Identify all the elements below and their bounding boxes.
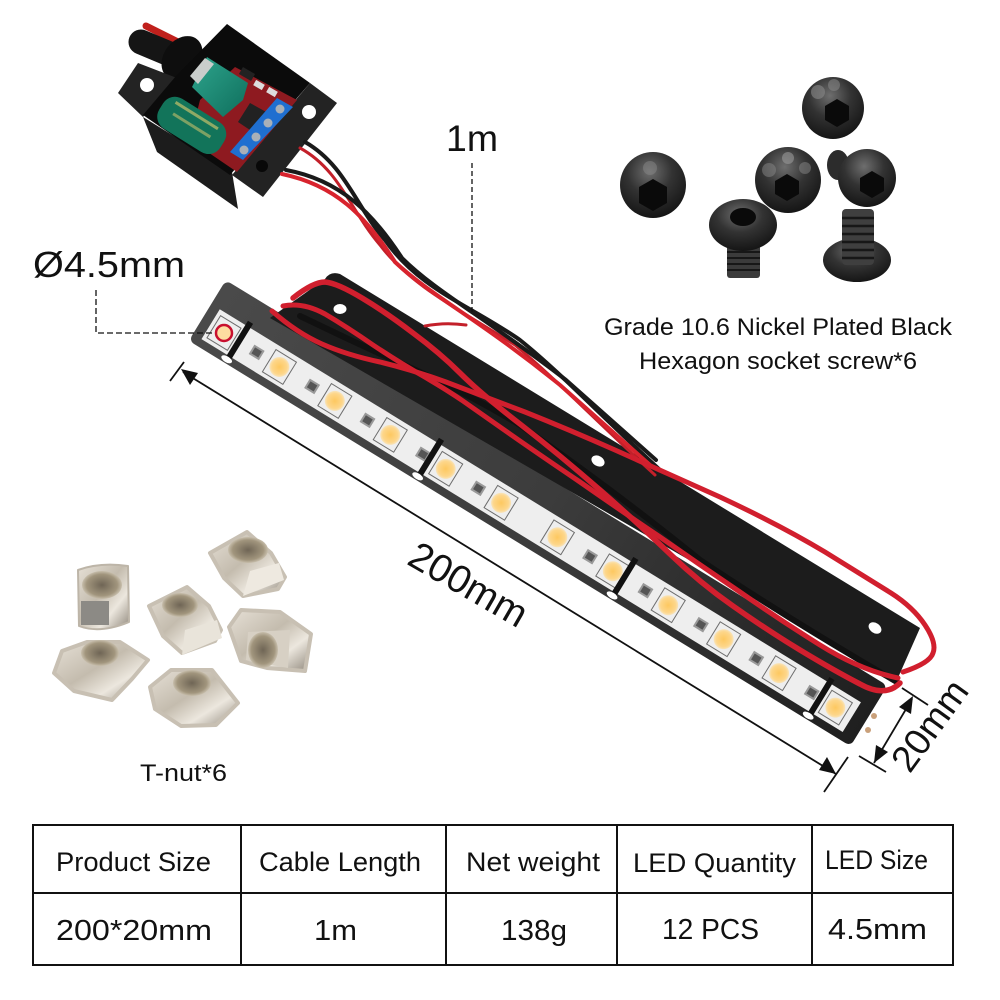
screws [620,77,896,282]
nut 5 [54,640,148,700]
red wire from top loop [293,282,900,691]
T-nuts [54,532,311,726]
dimension: 200mm arrow [170,362,848,792]
screw 4 [827,149,896,207]
header: Cable Length: Cable Length [259,847,421,877]
screws caption [604,314,953,375]
white LED tape [201,309,861,732]
black run along plate [300,316,897,682]
value: product size: 200*20mm [56,915,212,947]
value: net weight: 138g [501,915,567,947]
label: 1m: 1m [446,118,498,159]
header: Product Size: Product Size [56,847,211,877]
red wire to right loop [272,311,934,672]
nut 4 [229,610,311,671]
capacitor [152,92,232,159]
header: LED Quantity: LED Quantity [633,848,797,878]
controller cable pair two [282,174,650,465]
screws caption: Grade 10.6 Nickel Plated Black [604,314,953,341]
grey plate [189,280,888,746]
specification table [33,825,953,965]
blue terminal block [230,98,293,160]
controller cable pair one [305,142,660,470]
LED chips [207,316,852,725]
zip ties [220,319,836,721]
dimmer controller [118,24,337,209]
screw 2 [620,152,686,218]
value: cable length: 1m [314,915,357,947]
thin red wire [283,305,898,678]
label: LED diameter: Ø4.5mm [33,244,185,285]
screw 1 [802,77,864,139]
value: LED quantity: 12 PCS [662,914,759,946]
LED end pads [865,713,877,733]
label: 20mm: 20mm [883,672,977,779]
LED highlight ring [216,325,232,341]
nut 1 [78,565,129,629]
nut 2 [210,532,285,596]
value: LED size: 4.5mm [828,914,927,946]
potentiometer [192,57,248,117]
label: 200mm: 200mm [401,534,535,636]
nut 6 [150,670,238,726]
header: Net weight: Net weight [466,847,601,877]
mounting flanges [118,63,177,117]
screw 6 [823,209,891,282]
LED strip lower plate [189,280,888,746]
screw 3 [755,147,821,213]
cables [272,142,934,691]
nut 3 [149,587,222,655]
box body [143,117,238,209]
T-nut caption: T-nut*6 [140,760,227,787]
callout: LED diameter dashed line [96,290,218,333]
dimension: 20mm arrow [859,688,928,772]
callout: 1m dashed line [471,163,473,315]
screws caption: Hexagon socket screw*6 [639,348,917,375]
resistors [250,346,818,699]
header: LED Size: LED Size [825,845,928,875]
knob [141,26,211,88]
box interior [143,24,310,175]
circuit board [190,67,297,172]
upper black plate [270,273,920,680]
screw 5 [709,199,777,278]
